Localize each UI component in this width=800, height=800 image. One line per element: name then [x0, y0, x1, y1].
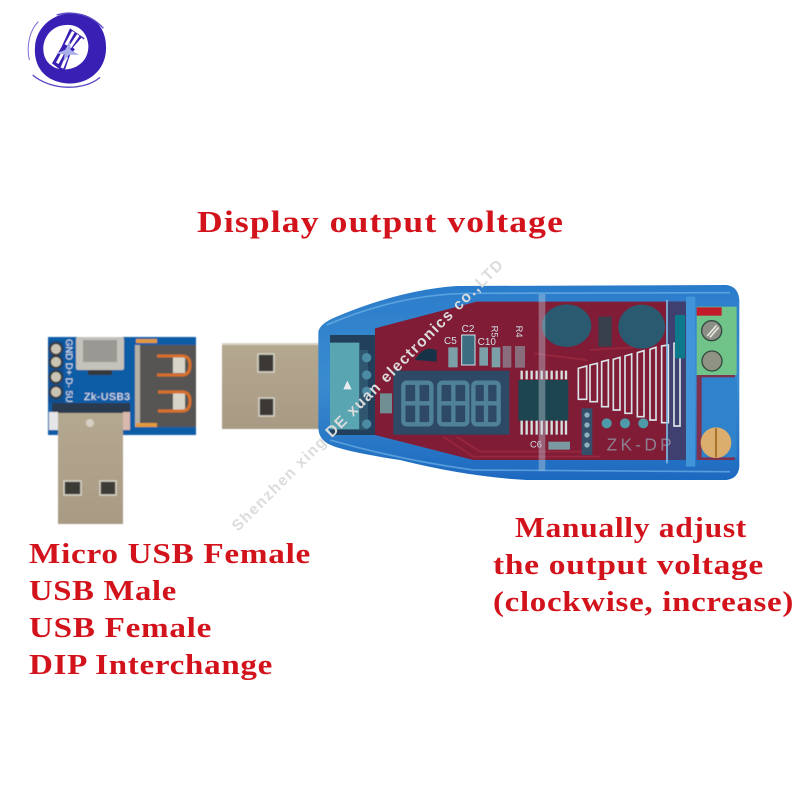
red circuit board: [375, 302, 695, 460]
blue transparent case: [318, 285, 739, 480]
bright reflection strip: [539, 294, 545, 471]
pin labels: GND D+ D- 5U: [63, 339, 74, 403]
small components and labels: C5: [444, 336, 457, 347]
text block: manual adjustment: Manually adjust: [515, 513, 747, 544]
copper traces: [443, 347, 633, 457]
contact strip: [49, 403, 130, 430]
IC chip: [518, 371, 568, 435]
blue PCB: [48, 337, 196, 435]
text block: adapter features: USB Male: [29, 576, 177, 607]
green screw terminal: [697, 307, 737, 375]
small components and labels: C10: [478, 337, 496, 348]
USB male plug of the converter: [222, 343, 319, 429]
brass adjust screw: [701, 427, 731, 458]
small components and labels: C2: [462, 324, 475, 335]
case highlights: [327, 293, 730, 472]
USB male plug, vertical: [58, 413, 123, 524]
inductor left: [542, 304, 591, 347]
small components and labels: ZK-DP: [607, 435, 672, 455]
heat-sink copper pattern: [578, 342, 680, 426]
text block: adapter features: DIP Interchange: [29, 650, 273, 681]
icon: company logo: [28, 13, 106, 87]
blue potentiometer: [697, 375, 737, 460]
heading: display output voltage: Display output voltage: [197, 204, 564, 239]
board label: Zk-USB3: [84, 391, 130, 403]
USB voltage converter module: [318, 285, 739, 480]
darker right board section: [667, 302, 695, 460]
LED voltage display: [393, 371, 509, 435]
text block: adapter features: [29, 539, 311, 681]
text block: manual adjustment: (clockwise, increase): [493, 587, 794, 618]
text block: manual adjustment: [493, 513, 794, 618]
internal connector: [330, 343, 371, 430]
header pins: [582, 408, 592, 455]
adapter board with USB connectors: [48, 337, 196, 524]
small components and labels: [380, 324, 672, 455]
plug slot lower: [259, 398, 274, 416]
right case divider: [666, 297, 695, 467]
small components and labels: R5: [490, 326, 500, 338]
text block: adapter features: USB Female: [29, 613, 212, 644]
left board section: [330, 335, 375, 435]
small components and labels: C6: [530, 439, 542, 449]
capacitor C4: [598, 317, 612, 347]
text block: adapter features: Micro USB Female: [29, 539, 311, 570]
watermark: Shenzhen xing DE xuan electronics co.,LTD: [229, 257, 507, 535]
inductor right: [618, 305, 665, 349]
text block: manual adjustment: the output voltage: [493, 550, 764, 581]
plug slot upper: [258, 354, 274, 372]
USB female socket: [135, 339, 196, 427]
small components and labels: R4: [514, 326, 524, 338]
pin holes: [48, 341, 64, 403]
micro USB female socket: [76, 337, 124, 375]
